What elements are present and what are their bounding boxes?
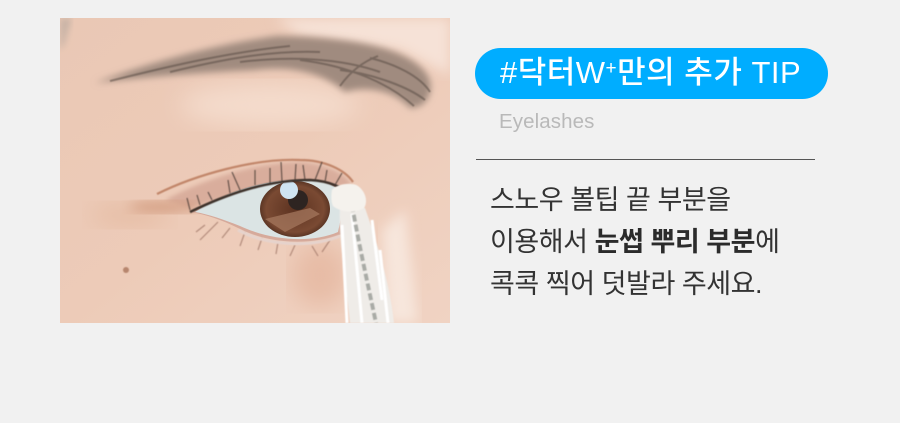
iris <box>260 181 330 237</box>
mole <box>123 267 129 273</box>
body text <box>490 185 779 299</box>
body text: 콕콕 찍어 덧발라 주세요. <box>490 269 762 299</box>
badge title: #닥터W+만의 추가 TIP <box>500 55 801 90</box>
eyebrow <box>95 36 431 108</box>
hair at corner <box>60 18 72 50</box>
forehead highlight <box>275 18 450 75</box>
eyelid crease <box>157 160 353 194</box>
photo: eye with mascara brush applied at the lash root <box>60 18 450 323</box>
tip pill badge <box>475 48 828 99</box>
upper lashes <box>187 162 347 212</box>
eyelid <box>165 162 352 208</box>
mascara brush <box>331 184 394 323</box>
body text: 스노우 볼팁 끝 부분을 <box>490 185 731 215</box>
eye shadow at outer corner <box>129 201 201 213</box>
divider <box>476 159 815 160</box>
eye <box>192 180 340 242</box>
body text: 이용해서 눈썹 뿌리 부분에 <box>490 227 779 257</box>
cheek highlight <box>382 210 418 323</box>
subtitle: Eyelashes <box>499 110 594 133</box>
lower lashes <box>196 222 330 256</box>
